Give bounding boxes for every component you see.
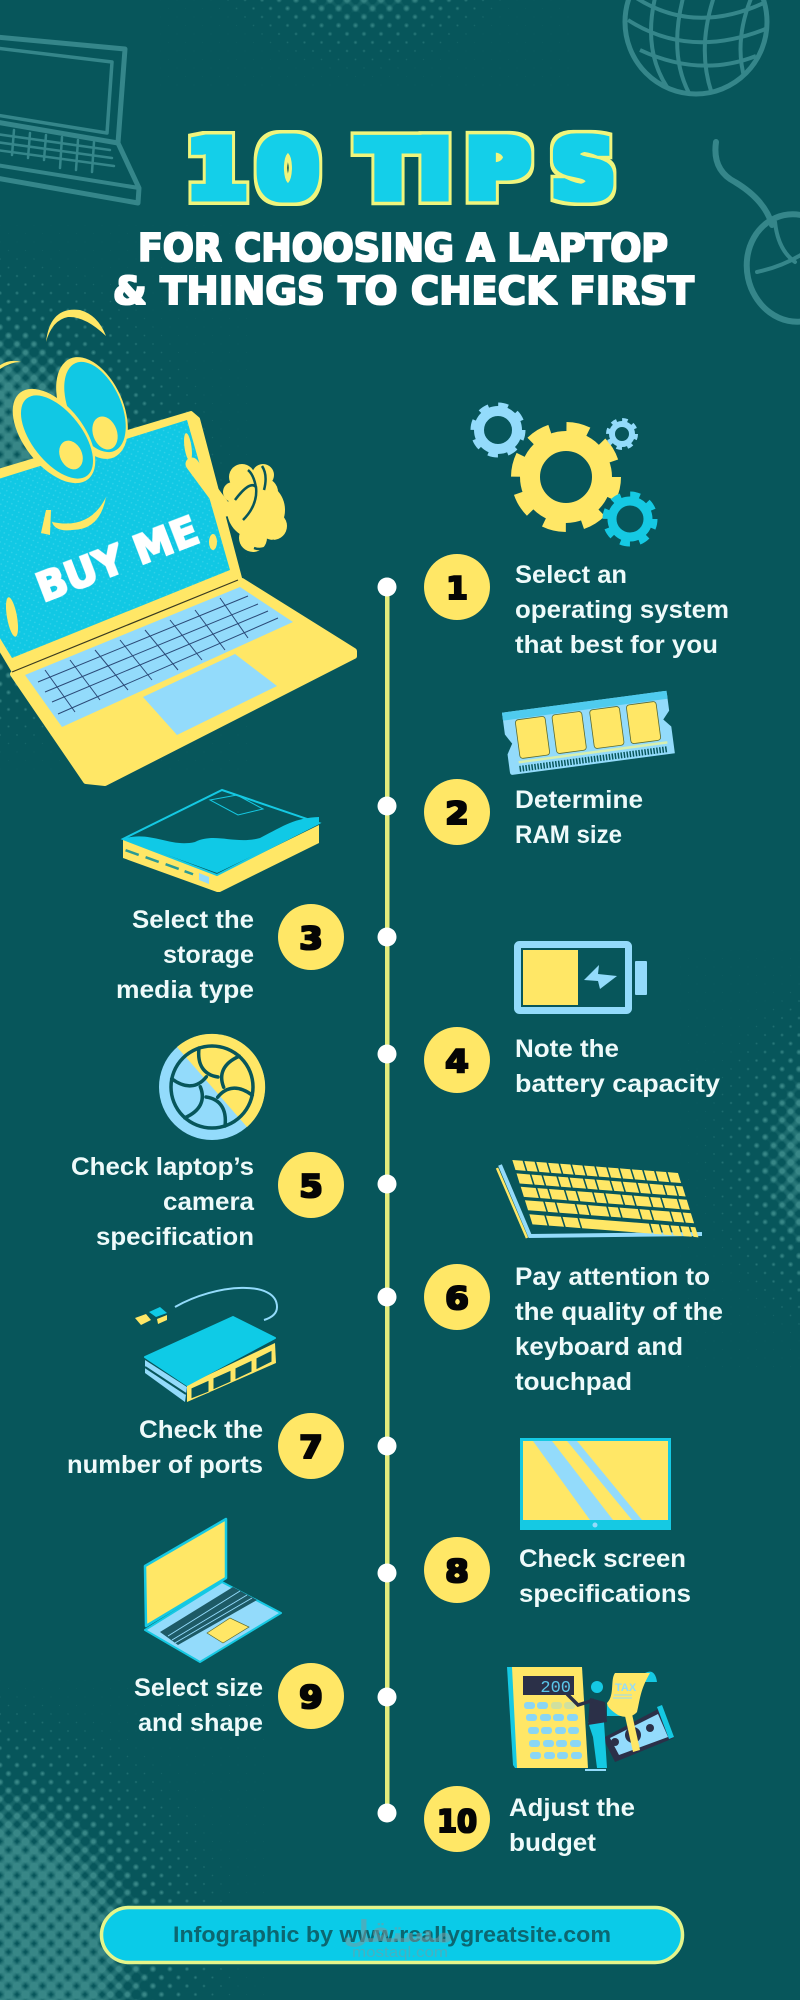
number badge 6 xyxy=(424,1264,490,1330)
footer credit text: Infographic by www.reallygreatsite.com xyxy=(173,1922,611,1947)
title: 10 TIPS xyxy=(187,122,614,218)
step 3 xyxy=(116,790,344,1004)
icon: calculator, person, tax bill and money xyxy=(507,1667,674,1771)
step 2 xyxy=(424,691,675,849)
number badge 1 xyxy=(424,554,490,620)
text: tip 5 xyxy=(71,1153,255,1251)
number badge 9 xyxy=(278,1663,344,1729)
text: tip 1 xyxy=(515,561,729,659)
subtitle: & THINGS TO CHECK FIRST xyxy=(113,269,694,313)
text: tip 9: Select size xyxy=(134,1674,263,1702)
text: tip 5: camera xyxy=(163,1188,255,1216)
number badge 5: 5 xyxy=(299,1169,323,1205)
text: tip 1: that best for you xyxy=(515,631,718,659)
step 9 xyxy=(134,1519,344,1737)
icon: keyboard xyxy=(497,1165,702,1238)
number badge 3 xyxy=(278,904,344,970)
step 4 xyxy=(424,944,720,1098)
footer pill xyxy=(102,1908,682,1962)
number badge 2 xyxy=(424,779,490,845)
number badge 10 xyxy=(424,1786,490,1852)
number badge 6: 6 xyxy=(445,1281,469,1317)
text: tip 3 xyxy=(116,906,254,1004)
text: tip 5: specification xyxy=(96,1223,254,1251)
text: tip 6: Pay attention to xyxy=(515,1263,710,1291)
text: tip 7: number of ports xyxy=(67,1451,263,1479)
text: tip 10 xyxy=(509,1794,635,1857)
number badge 7 xyxy=(278,1413,344,1479)
text: tip 7: Check the xyxy=(139,1416,263,1444)
number badge 10: 10 xyxy=(437,1804,477,1840)
number badge 8 xyxy=(424,1537,490,1603)
step 10 xyxy=(424,1667,674,1857)
subtitle: FOR CHOOSING A LAPTOP xyxy=(138,226,668,270)
subtitle xyxy=(113,226,694,313)
text: tip 1: operating system xyxy=(515,596,729,624)
watermark: mostaql.com xyxy=(352,1944,448,1961)
text: tip 2 xyxy=(515,786,643,849)
icon: calculator, person, tax bill and money: TAX xyxy=(615,1682,637,1694)
icon: gears xyxy=(474,406,654,543)
text: tip 6 xyxy=(515,1263,723,1396)
text: tip 5: Check laptop’s xyxy=(71,1153,254,1181)
icon: display screen xyxy=(520,1438,671,1530)
step 6 xyxy=(424,1165,723,1396)
background line art: globe xyxy=(625,0,770,95)
text: tip 2: RAM size xyxy=(515,821,622,849)
number badge 4 xyxy=(424,1027,490,1093)
icon: battery xyxy=(518,944,647,1010)
text: tip 8: Check screen xyxy=(519,1545,686,1573)
text: tip 3: storage xyxy=(163,941,254,969)
icon: open laptop xyxy=(145,1519,281,1662)
icon: port hub with cable xyxy=(135,1288,277,1402)
text: tip 3: Select the xyxy=(132,906,254,934)
icon: camera shutter xyxy=(159,1034,265,1140)
number badge 9: 9 xyxy=(299,1680,323,1716)
hand pointing at screen xyxy=(192,464,287,552)
text: tip 4 xyxy=(515,1035,720,1098)
text: tip 9 xyxy=(134,1674,263,1737)
icon: calculator, person, tax bill and money: 200 xyxy=(540,1679,571,1698)
text: tip 7 xyxy=(67,1416,263,1479)
icon: storage drive xyxy=(123,790,319,892)
text: tip 10: Adjust the xyxy=(509,1794,635,1822)
text: tip 6: the quality of the xyxy=(515,1298,723,1326)
number badge 7: 7 xyxy=(299,1430,323,1466)
text: tip 4: Note the xyxy=(515,1035,619,1063)
text: tip 1: Select an xyxy=(515,561,627,589)
text: tip 9: and shape xyxy=(138,1709,263,1737)
step 1 xyxy=(424,406,729,659)
text: tip 4: battery capacity xyxy=(515,1070,720,1098)
icon: RAM module xyxy=(502,691,675,775)
background line art: computer mouse xyxy=(715,142,800,331)
step 5 xyxy=(71,1034,344,1251)
number badge 8: 8 xyxy=(445,1554,469,1590)
text: tip 10: budget xyxy=(509,1829,597,1857)
background line art: laptop xyxy=(0,37,139,203)
illustration: laptop mascot saying buy me xyxy=(0,310,354,783)
number badge 3: 3 xyxy=(299,921,323,957)
number badge 1: 1 xyxy=(446,571,468,607)
right eye xyxy=(42,346,142,470)
text: tip 6: keyboard and xyxy=(515,1333,683,1361)
text: tip 8 xyxy=(519,1545,691,1608)
text: tip 8: specifications xyxy=(519,1580,691,1608)
text: tip 2: Determine xyxy=(515,786,643,814)
left eye xyxy=(0,374,112,498)
watermark: مستقل xyxy=(343,1915,453,1950)
number badge 5 xyxy=(278,1152,344,1218)
step 7 xyxy=(67,1288,344,1479)
timeline xyxy=(378,578,396,1822)
buy me text: BUY ME xyxy=(30,508,205,612)
step 8 xyxy=(424,1438,691,1608)
number badge 4: 4 xyxy=(445,1044,469,1080)
text: tip 6: touchpad xyxy=(515,1368,632,1396)
text: tip 3: media type xyxy=(116,976,254,1004)
number badge 2: 2 xyxy=(445,796,469,832)
